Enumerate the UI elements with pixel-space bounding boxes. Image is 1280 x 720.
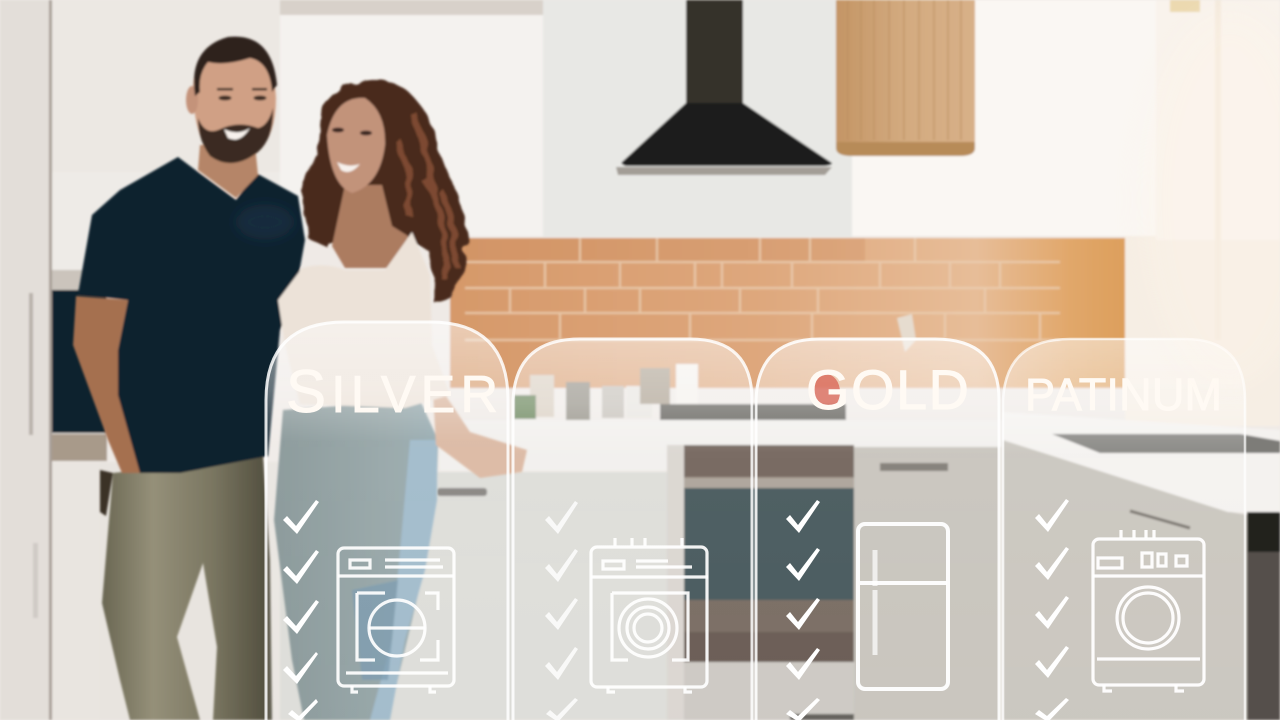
man's trousers — [102, 456, 272, 720]
man's brows and eyes — [217, 88, 267, 100]
couple — [73, 37, 527, 720]
lower cabinet left — [52, 445, 685, 720]
checklist: second tier — [545, 501, 578, 720]
man's belt strap — [100, 470, 113, 516]
panel: second silver tier — [513, 339, 752, 720]
corner cabinet platinum — [1003, 440, 1250, 720]
man's arm — [73, 296, 152, 473]
gold heading accent — [812, 374, 840, 410]
heading: platinum: PATINUM — [1025, 369, 1222, 420]
icon: washing machine platinum — [1093, 530, 1204, 691]
woman's jeans — [274, 400, 438, 720]
heading: gold: GOLD — [806, 358, 969, 421]
man's beard — [198, 108, 273, 163]
icon: washing machine second tier — [591, 538, 708, 692]
man's shoulder highlight — [235, 204, 295, 240]
man's hair — [194, 37, 277, 96]
panel: platinum — [1003, 339, 1245, 720]
woman's blouse — [278, 232, 450, 408]
woman's forearm — [432, 375, 527, 478]
induction hob — [1052, 434, 1280, 453]
woman's blue jean side — [370, 440, 437, 720]
checklist: platinum — [1035, 499, 1069, 720]
wall behind hood — [543, 0, 853, 237]
man's ear — [186, 86, 198, 114]
cabinet handle — [1130, 511, 1190, 528]
tall left cabinet — [0, 0, 52, 720]
woman's hair — [302, 79, 468, 306]
range hood — [616, 0, 832, 175]
woman — [274, 79, 527, 720]
sunlit window — [1125, 0, 1280, 426]
woman's neck and chest — [332, 185, 408, 268]
checklist: silver — [283, 500, 319, 720]
pricing panels — [266, 322, 1245, 720]
man's neck — [198, 145, 258, 198]
brick backsplash — [450, 238, 1125, 388]
upper middle cabinet — [280, 0, 550, 236]
dark dishwasher right — [1247, 512, 1280, 720]
built-in oven left — [52, 290, 107, 461]
man's shirt — [78, 157, 305, 473]
woman's eyes — [332, 128, 372, 135]
right upper cabinet — [852, 0, 1156, 236]
sunlight haze — [1140, 10, 1280, 390]
panel: gold — [756, 339, 999, 720]
woman's smile — [337, 162, 360, 172]
woman's face — [327, 98, 385, 193]
icon: refrigerator — [858, 524, 948, 689]
woman's inner jean shadow — [352, 580, 398, 680]
upper left cabinet — [52, 0, 280, 290]
man — [73, 37, 305, 720]
white countertop — [440, 420, 1003, 470]
heading: silver: SILVER — [286, 358, 498, 425]
countertop items — [514, 314, 916, 420]
icon: washing machine silver — [338, 548, 454, 692]
man's head — [193, 43, 276, 162]
lower cabinet gold — [854, 447, 1000, 720]
wooden pendant lamp — [836, 0, 975, 156]
man's smile — [224, 128, 250, 140]
panel: silver — [266, 322, 508, 720]
checklist: gold — [786, 500, 820, 720]
cooktop on counter — [660, 404, 846, 424]
built-in oven — [684, 445, 854, 720]
corner countertop — [1003, 412, 1280, 512]
